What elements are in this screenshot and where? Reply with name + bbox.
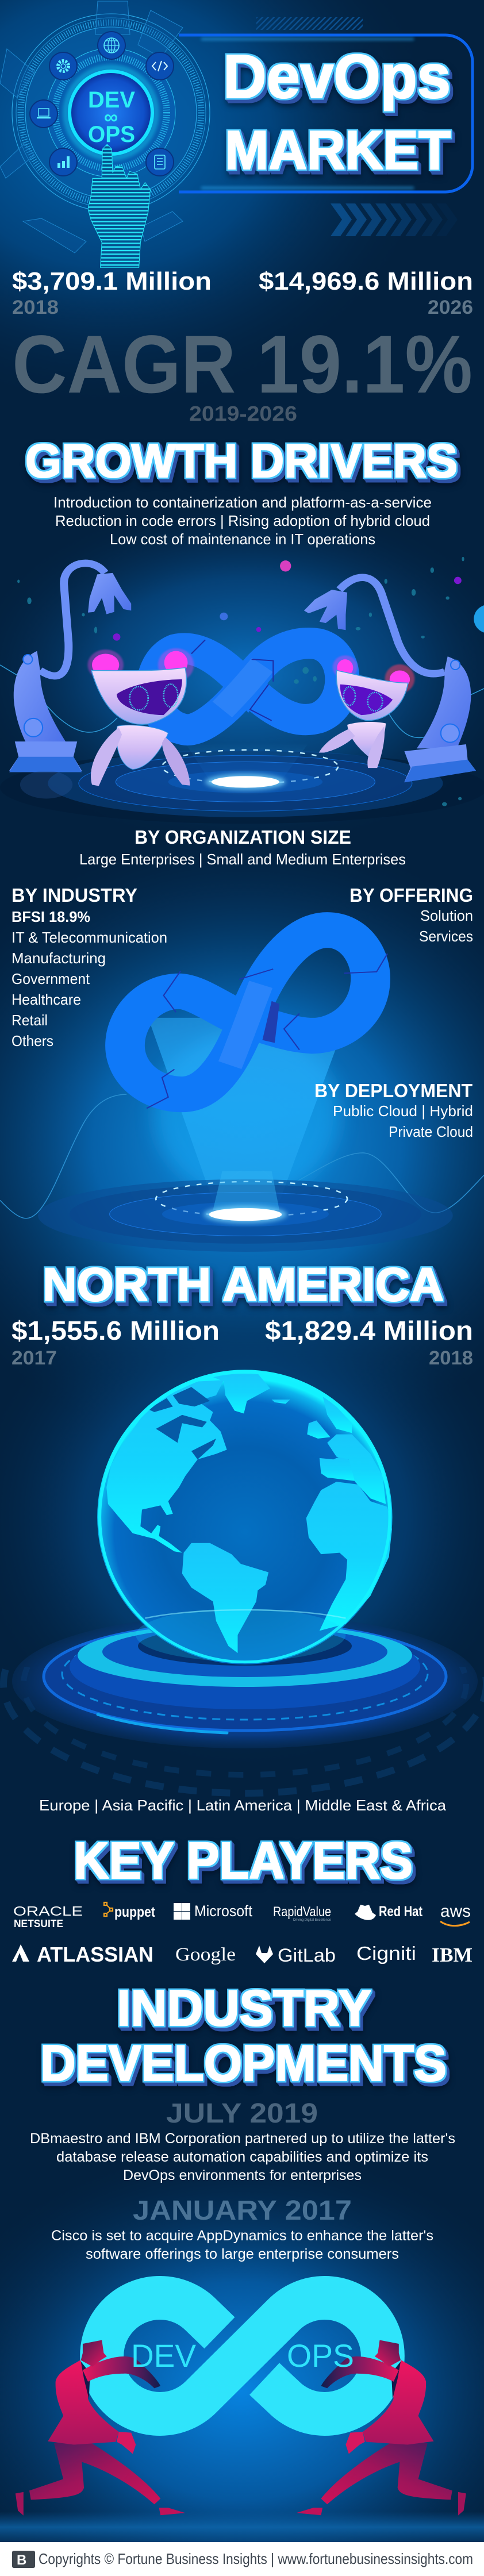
wires <box>0 665 484 738</box>
growth drivers list: Reduction in code errors | Rising adoption of hybrid cloud <box>55 512 430 529</box>
stat: north america 2017 <box>11 1316 220 1369</box>
title frame <box>179 17 473 192</box>
floor shadow <box>0 751 484 824</box>
segment: by industry: BFSI 18.9% <box>11 908 90 925</box>
segment: by deployment: Private Cloud <box>389 1123 473 1140</box>
development: DBmaestro <box>30 2131 455 2183</box>
stat: 2018 market size <box>12 267 212 318</box>
dial text <box>88 87 135 147</box>
rim glow <box>99 1372 390 1662</box>
heading: industry: INDUSTRY <box>117 1979 371 2036</box>
hologram dial illustration <box>0 1 210 267</box>
right figure <box>297 2340 466 2516</box>
segment: by industry <box>11 885 167 1049</box>
segment: by offering: BY OFFERING <box>349 885 473 906</box>
development: DBmaestro: DevOps environments for enterprises <box>123 2167 362 2183</box>
development: Cisco <box>51 2228 433 2262</box>
planets <box>113 560 484 641</box>
icon: wireframe hand <box>88 144 151 267</box>
segment: by industry: Government <box>11 970 90 987</box>
logo: Oracle NetSuite <box>13 1904 83 1929</box>
stat: 2026 market size: 2026 <box>428 297 473 318</box>
continents <box>106 1372 392 1653</box>
title: MARKET: MARKET <box>225 120 451 181</box>
logo: puppet: puppet <box>114 1904 156 1920</box>
infinity ribbon <box>153 643 342 730</box>
logo: Oracle NetSuite: NETSUITE <box>14 1918 63 1929</box>
logo: RapidValue: RapidValue <box>273 1904 331 1920</box>
development: Cisco: Cisco is set to acquire AppDynamics to enhance the latter's <box>51 2228 433 2244</box>
logo: Google: Google <box>175 1944 236 1965</box>
chevrons decoration <box>331 203 458 236</box>
icon: globe <box>98 32 125 59</box>
segment: by offering <box>349 885 473 945</box>
heading: north america: NORTH AMERICA <box>43 1259 444 1311</box>
growth drivers list <box>53 494 432 548</box>
left robot <box>88 648 194 786</box>
development: Cisco: software offerings to large enterprise consumers <box>86 2246 399 2262</box>
logo: aws: aws <box>440 1902 471 1921</box>
logo: Oracle NetSuite: ORACLE <box>13 1904 83 1918</box>
segment: by industry: Healthcare <box>11 991 81 1008</box>
segment: by offering: Solution <box>420 907 473 924</box>
holo platform <box>38 1179 453 1252</box>
footer logo <box>12 2551 35 2568</box>
footer logo: B <box>17 2552 26 2568</box>
heading: developments: DEVELOPMENTS <box>40 2035 447 2091</box>
segment: by industry: Others <box>11 1032 53 1049</box>
segment: by deployment: BY DEPLOYMENT <box>314 1080 473 1101</box>
icon: gear <box>49 52 77 80</box>
logo: GitLab <box>256 1945 336 1966</box>
holo platform <box>48 749 443 817</box>
icon: laptop <box>30 100 57 128</box>
CAGR period: 2019-2026 <box>189 402 297 425</box>
stat: 2026 market size: $14,969.6 Million <box>259 267 473 295</box>
globe <box>97 1370 393 1664</box>
dial text: ∞ <box>104 106 118 128</box>
back glow <box>154 1032 340 1199</box>
logo: Microsoft <box>174 1902 252 1920</box>
label: DEV: DEV <box>131 2337 197 2374</box>
logo: Microsoft: Microsoft <box>194 1902 252 1920</box>
scattered particles <box>17 557 464 806</box>
segment: by deployment <box>314 1080 473 1140</box>
development: DBmaestro: DBmaestro and IBM Corporation partnered up to utilize the latter's <box>30 2131 455 2147</box>
stat: north america 2018: 2018 <box>429 1347 473 1369</box>
light beam <box>185 743 309 783</box>
icon: clipboard <box>146 148 174 176</box>
right robot arm <box>304 578 476 782</box>
heading: by organization size: BY ORGANIZATION SIZE <box>135 826 351 848</box>
logo: Atlassian: ATLASSIAN <box>37 1943 153 1966</box>
logo: Red Hat: Red Hat <box>379 1904 423 1920</box>
stat: north america 2017: $1,555.6 Million <box>11 1316 220 1345</box>
growth drivers list: Low cost of maintenance in IT operations <box>110 530 375 548</box>
segment: by industry: Manufacturing <box>11 949 106 967</box>
robots illustration <box>0 557 484 824</box>
segment: by industry: Retail <box>11 1012 48 1029</box>
tilted infinity <box>125 930 371 1094</box>
stat: north america 2018 <box>265 1316 473 1369</box>
date: January 2017: JANUARY 2017 <box>133 2196 352 2226</box>
logo: GitLab: GitLab <box>278 1945 336 1966</box>
title: DevOps: DevOps <box>223 41 451 111</box>
growth drivers list: Introduction to containerization and platform-as-a-service <box>53 494 432 511</box>
heading: key players: KEY PLAYERS <box>74 1832 413 1890</box>
footer <box>0 2542 484 2576</box>
inland waters <box>148 1387 216 1459</box>
DevOps infinity illustration <box>16 2298 466 2516</box>
logo: RapidValue: Driving Digital Excellence <box>293 1918 332 1922</box>
stat: 2018 market size: $3,709.1 Million <box>12 267 212 295</box>
dial text: OPS <box>88 122 135 147</box>
dial text: DEV <box>88 87 135 113</box>
segment: by industry: IT & Telecommunication <box>11 929 167 946</box>
stat: north america 2018: $1,829.4 Million <box>265 1316 473 1345</box>
stat: north america 2017: 2017 <box>11 1347 57 1369</box>
logo: IBM: IBM <box>432 1944 473 1966</box>
left robot arm <box>9 563 131 798</box>
logo: Red Hat <box>355 1904 423 1920</box>
segment: by offering: Services <box>419 928 473 945</box>
organization size items: Large Enterprises | Small and Medium Enterprises <box>79 851 406 868</box>
stat: 2018 market size: 2018 <box>12 297 59 318</box>
holo ring platform <box>0 1627 484 1797</box>
logo: puppet <box>104 1902 156 1920</box>
left figure <box>16 2340 185 2516</box>
date: July 2019: JULY 2019 <box>166 2098 318 2129</box>
heading: growth drivers: GROWTH DRIVERS <box>25 434 458 487</box>
segment illustration <box>0 930 484 1252</box>
segment: by industry: BY INDUSTRY <box>11 885 137 906</box>
label: OPS: OPS <box>287 2337 354 2374</box>
back light beam <box>148 1018 347 1210</box>
segment: by deployment: Public Cloud | Hybrid <box>333 1102 473 1120</box>
floor glow <box>0 2512 484 2543</box>
logo: Cigniti: Cigniti <box>356 1943 416 1964</box>
right robot <box>319 655 414 768</box>
icon: bar chart <box>49 148 77 176</box>
wave line <box>0 1094 484 1218</box>
regions list: Europe | Asia Pacific | Latin America | Middle East & Africa <box>39 1797 447 1814</box>
stat: 2026 market size <box>259 267 473 318</box>
development: DBmaestro: database release automation capabilities and optimize its <box>56 2149 428 2165</box>
icon: code <box>146 52 174 80</box>
